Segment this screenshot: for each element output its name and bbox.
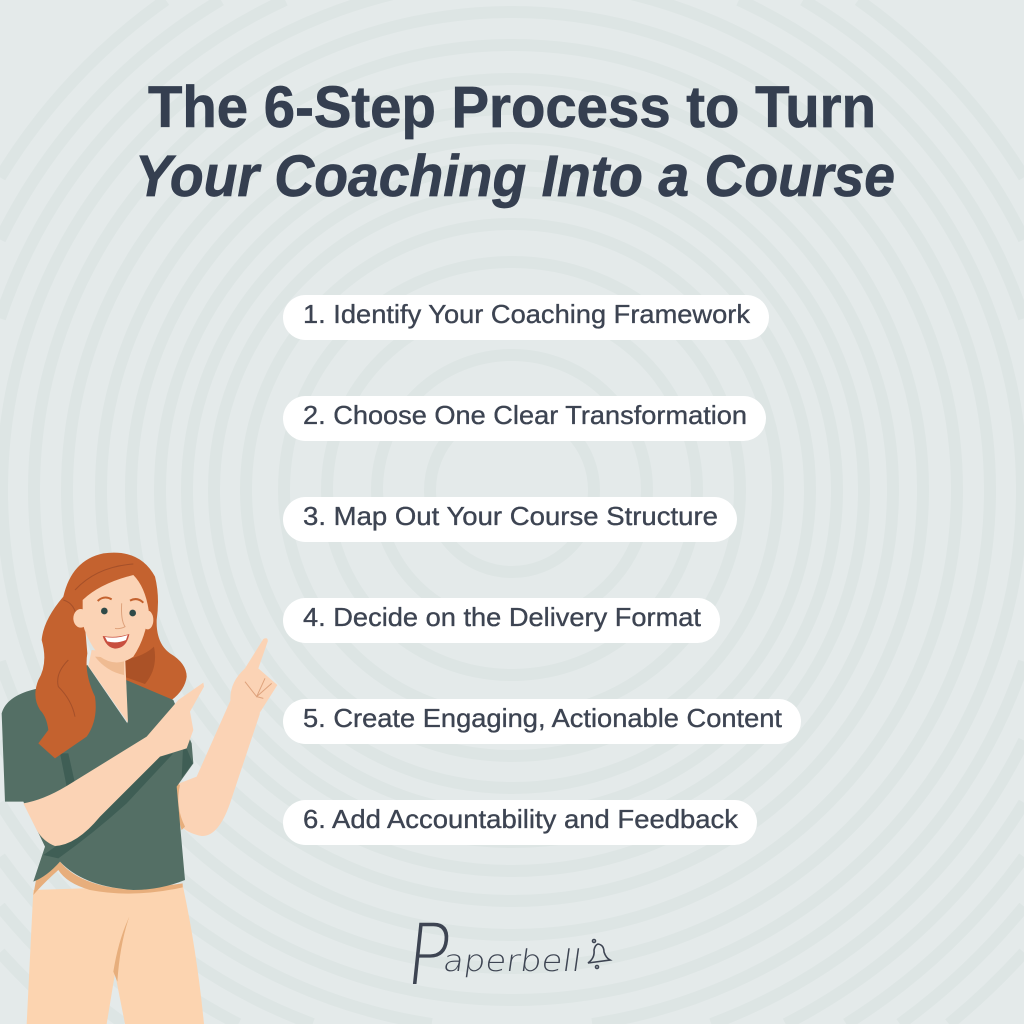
step 2: 2. Choose One Clear Transformation (303, 400, 747, 430)
raised hand (230, 638, 277, 715)
illustration: pointing woman (2, 553, 277, 1024)
step 5 (283, 699, 801, 744)
face (73, 575, 153, 662)
step 4 (283, 598, 720, 643)
hair front (35, 553, 155, 758)
shirt (2, 665, 193, 890)
step 3: 3. Map Out Your Course Structure (303, 501, 718, 531)
logo (402, 906, 610, 1004)
right arm (175, 700, 260, 836)
neck and chest (88, 650, 128, 723)
step 5: 5. Create Engaging, Actionable Content (303, 703, 783, 733)
step 3 (283, 497, 737, 542)
step 6 (283, 800, 757, 845)
pants (27, 885, 204, 1024)
title (135, 75, 895, 209)
step 4: 4. Decide on the Delivery Format (303, 602, 702, 632)
hair back (100, 570, 187, 700)
step list (283, 295, 801, 845)
step 6: 6. Add Accountability and Feedback (303, 804, 739, 834)
step 1 (283, 295, 769, 340)
step 1: 1. Identify Your Coaching Framework (303, 299, 751, 329)
step 2 (283, 396, 766, 441)
logo: P (402, 906, 456, 1004)
title: Your Coaching Into a Course (135, 144, 895, 209)
icon: bell (588, 940, 610, 968)
front arm (23, 683, 204, 846)
title: The 6-Step Process to Turn (148, 75, 876, 140)
logo: aperbell (441, 944, 584, 979)
